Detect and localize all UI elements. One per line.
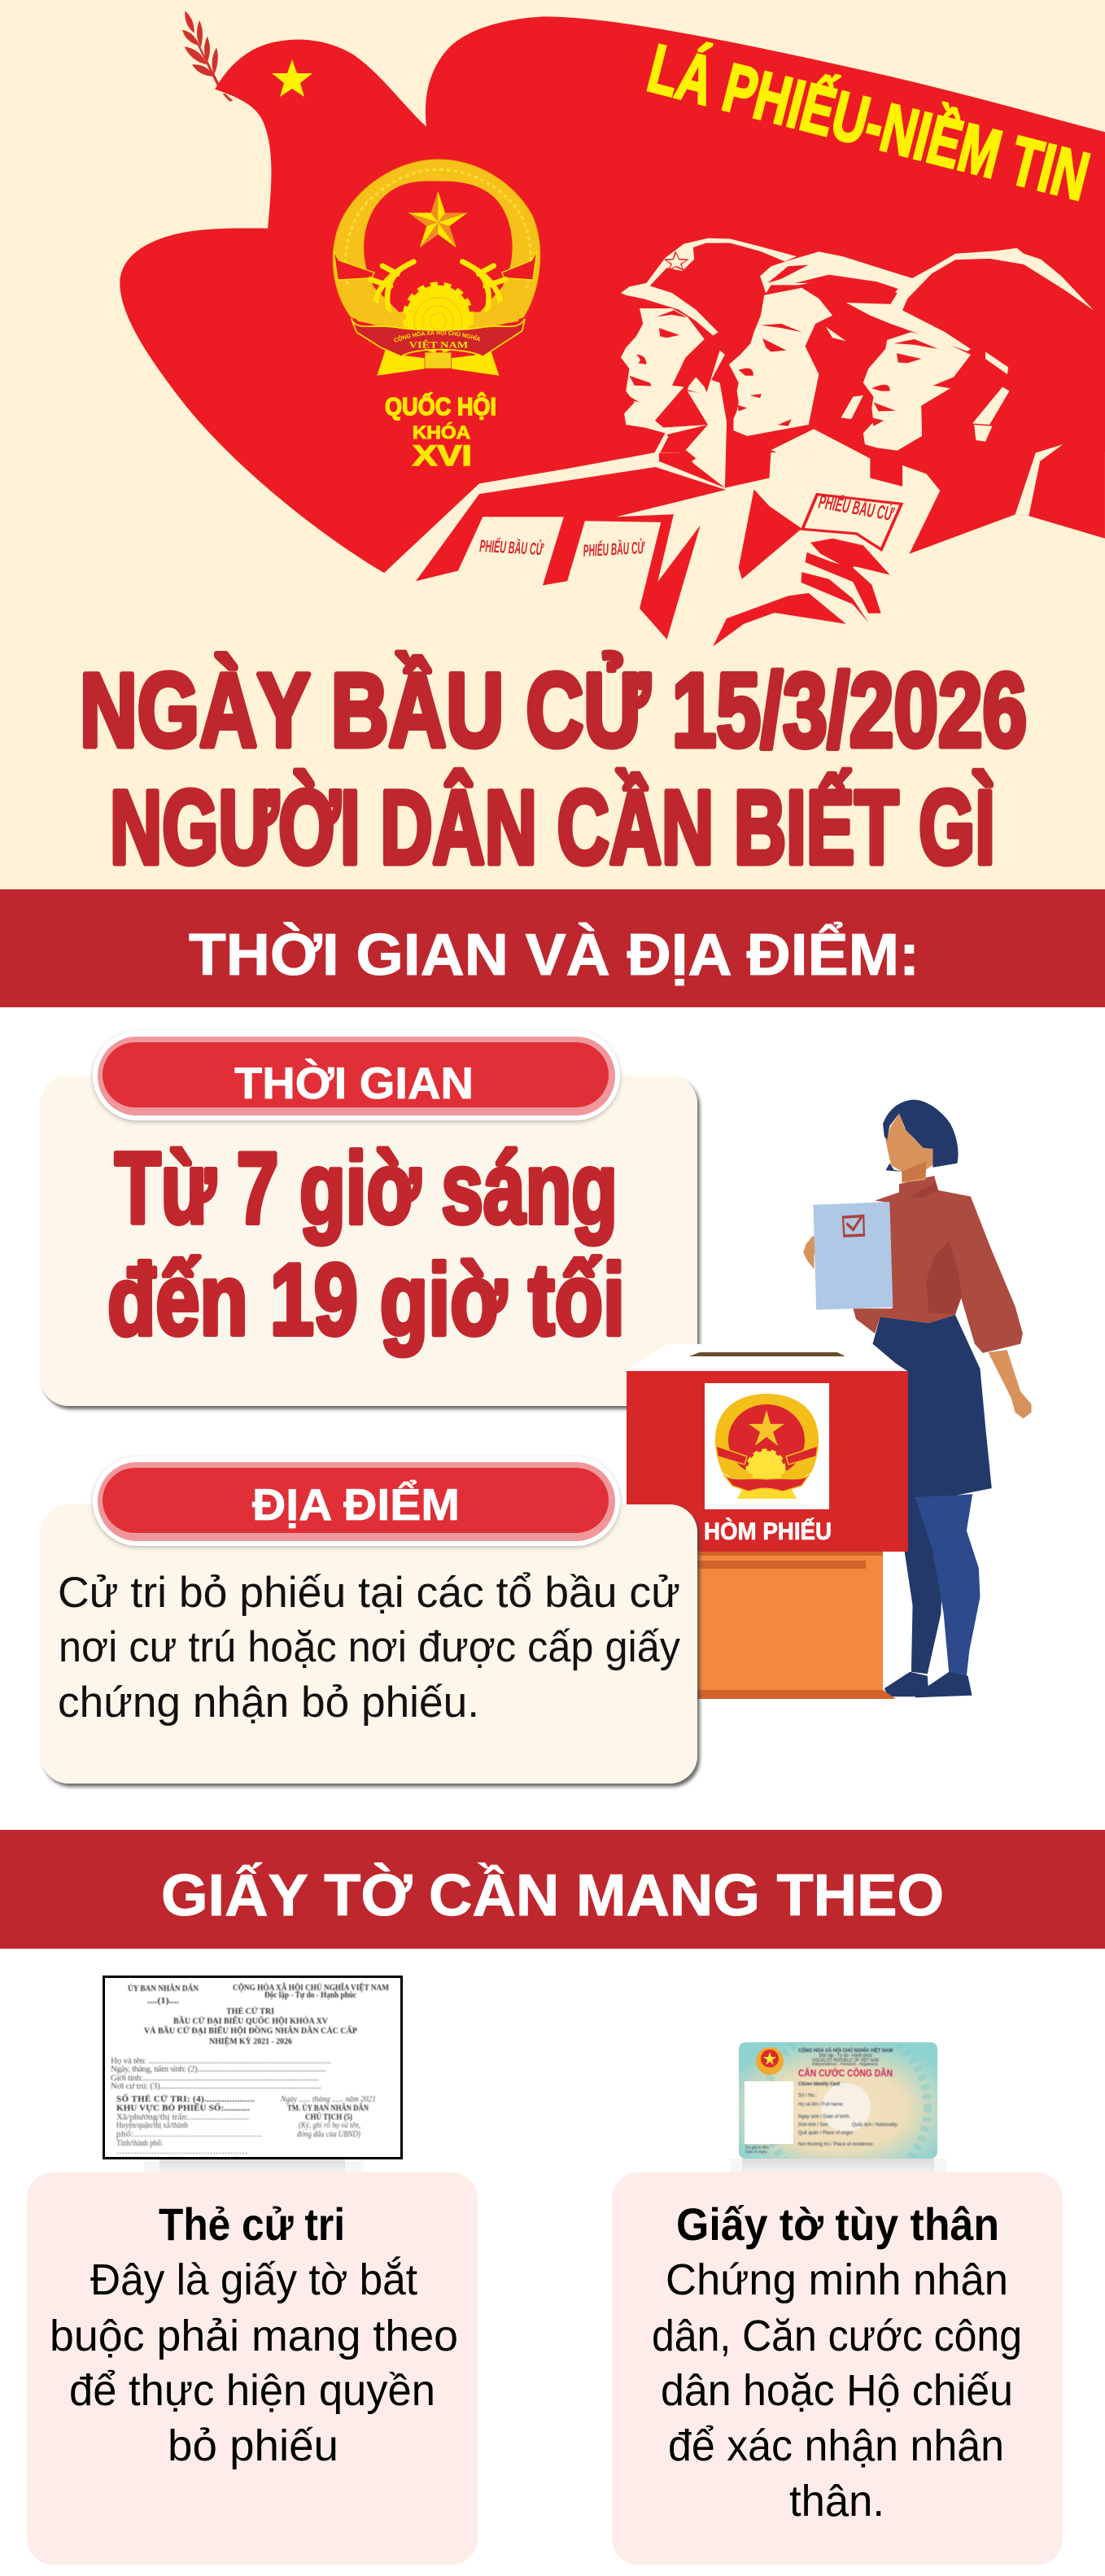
voter card fields: (Ký, ghi rõ họ và tên,: [299, 2120, 360, 2130]
time value text: Từ 7 giờ sáng: [115, 1133, 618, 1245]
voter card fields: Xã/phường/thị trấn:..........................: [116, 2112, 249, 2122]
voter card body text: bỏ phiếu: [168, 2421, 338, 2470]
first voter: face and neck: [570, 308, 727, 488]
ballot box label: HÒM PHIẾU: [704, 1517, 832, 1545]
identity document body text: [652, 2255, 1022, 2526]
voter card fields: đóng dấu của UBND): [297, 2129, 360, 2139]
voter card body text: để thực hiện quyền: [69, 2366, 435, 2415]
voter card header text: NHIỆM KỲ 2021 - 2026: [209, 2036, 292, 2046]
ballot label 2: PHIẾU BẦU CỬ: [583, 538, 646, 561]
identity document body text: để xác nhận nhân: [668, 2421, 1004, 2470]
second voter: face: [729, 288, 832, 436]
hero poster panel: [0, 0, 1105, 889]
voter card fields: Giới tính:.........................................................................................: [111, 2073, 319, 2083]
ballot box front: [627, 1371, 908, 1552]
left shoulder: [416, 467, 726, 585]
neck and collar second voter: [771, 429, 870, 478]
emblem star: [408, 191, 468, 247]
voter card body text: Đây là giấy tờ bắt: [90, 2255, 417, 2304]
panel: place: [41, 1504, 697, 1784]
ID card text: Quê quán / Place of origin:: [798, 2131, 854, 2136]
panel: time: [41, 1076, 697, 1406]
voter card header text: VÀ BẦU CỬ ĐẠI BIỂU HỘI ĐỒNG NHÂN DÂN CÁC CẤP: [144, 2025, 357, 2036]
second voter: facial features: [737, 324, 812, 436]
icon: star on the dove: [272, 59, 312, 97]
ID card text: Independence - Freedom - Happiness: [812, 2062, 878, 2067]
ballot box lid: [627, 1344, 907, 1371]
panel: voter card description: [27, 2172, 478, 2565]
ID card text: SOCIALIST REPUBLIC OF VIET NAM: [812, 2059, 879, 2063]
text: Quốc hội khóa XVI: QUỐC HỘI: [385, 391, 496, 421]
pill heading: time: THỜI GIAN: [234, 1058, 474, 1108]
section header: documents: [0, 1830, 1105, 1949]
voter card fields: KHU VỰC BỎ PHIẾU SỐ:...........: [116, 2102, 250, 2113]
voter card body text: [50, 2255, 458, 2470]
first voter: facial features: [628, 310, 708, 464]
main title: [80, 653, 1027, 886]
ID card text: Độc lập - Tự do - Hạnh phúc: [819, 2054, 872, 2059]
voter card header text: ....(1)....: [147, 1996, 179, 2006]
time value text: [107, 1133, 625, 1356]
ID card text: [745, 2047, 898, 2154]
ballot paper: [813, 1202, 893, 1310]
identity document title: Giấy tờ tùy thân: [676, 2198, 999, 2250]
voter card fields: TM. ỦY BAN NHÂN DÂN: [287, 2103, 369, 2113]
voter card header text: Độc lập - Tự do - Hạnh phúc: [264, 1990, 356, 2000]
held ballot card: [802, 495, 902, 549]
place description text: chứng nhận bỏ phiếu.: [58, 1679, 479, 1727]
ID card text: CĂN CƯỚC CÔNG DÂN: [798, 2068, 893, 2079]
voter card header text: [128, 1982, 390, 2046]
pill heading: time: [93, 1031, 620, 1120]
pill heading: place: [93, 1456, 620, 1546]
identity document body text: thân.: [789, 2477, 884, 2526]
voter card fields: Ngày, tháng, năm sinh: (2)....................................................................: [111, 2064, 326, 2074]
ID card text: Giới tính / Sex:: [798, 2123, 829, 2128]
ID card text: Số / No.:: [798, 2094, 817, 2098]
ID card emblem: [756, 2047, 784, 2075]
ID card text: Có giá trị đến:: [745, 2146, 770, 2150]
strap and collar details: [826, 326, 1063, 516]
voter card header text: THẺ CỬ TRI: [226, 2006, 274, 2016]
ID card text: CỘNG HÒA XÃ HỘI CHỦ NGHĨA VIỆT NAM: [798, 2047, 893, 2054]
panel: identity document description: [612, 2172, 1063, 2565]
pill heading: place: ĐỊA ĐIỂM: [252, 1479, 460, 1530]
voter card fields: CHỦ TỊCH (5): [305, 2112, 352, 2122]
voter card image: [104, 1977, 402, 2158]
white emblem plate: [705, 1383, 829, 1509]
voter card header text: ỦY BAN NHÂN DÂN: [128, 1984, 199, 1993]
ID card text: Nơi thường trú / Place of residence:: [798, 2142, 874, 2147]
identity document body text: dân hoặc Hộ chiếu: [661, 2366, 1013, 2415]
first voter: helmet outline: [621, 238, 797, 335]
voter card fields: Ngày ...... tháng ...... năm 2021: [280, 2094, 376, 2104]
illustration: woman voting at ballot box: [627, 1100, 1032, 1699]
ID card text: Quốc tịch / Nationality:: [852, 2123, 898, 2128]
citizen ID card image: [739, 2042, 937, 2159]
emblem country name: VIỆT NAM: [409, 339, 468, 351]
voter card fields: Nơi cư trú: (3)...............................................................................: [111, 2081, 321, 2091]
stand under ID card: [730, 2159, 946, 2175]
voter card fields: Họ và tên: ........................................................................................: [111, 2056, 331, 2066]
voter card body text: buộc phải mang theo: [50, 2312, 458, 2360]
ID card text: Date of expiry: [745, 2150, 768, 2154]
red collar and ballot hand: [640, 489, 890, 646]
emblem base: [377, 347, 499, 376]
ballot label 3: PHIẾU BẦU CỬ: [817, 490, 896, 526]
stand under voter card: [144, 2159, 364, 2175]
ID card text: Citizen Identity Card: [798, 2082, 840, 2087]
national emblem: [332, 159, 540, 376]
text: Quốc hội khóa XVI: [385, 391, 496, 472]
dove silhouette: [120, 16, 1105, 573]
place description text: Cử tri bỏ phiếu tại các tổ bầu cử: [58, 1569, 680, 1617]
text: Quốc hội khóa XVI: XVI: [413, 440, 472, 472]
second voter: hair highlight: [760, 251, 915, 294]
time value text: đến 19 giờ tối: [107, 1244, 625, 1356]
ID card text: Họ và tên / Full name:: [798, 2102, 844, 2107]
identity document body text: Chứng minh nhân: [666, 2255, 1008, 2304]
emblem scroll: [352, 319, 525, 356]
ID card text: Ngày sinh / Date of birth:: [798, 2115, 850, 2120]
figures: three voters: [570, 238, 1105, 646]
section header: time and place: THỜI GIAN VÀ ĐỊA ĐIỂM:: [189, 922, 919, 988]
emblem gear: [406, 286, 470, 349]
voter card fields: SỐ THẺ CỬ TRI: (4)....................: [116, 2094, 255, 2104]
place description text: [58, 1569, 680, 1727]
voter card fields: [111, 2056, 376, 2156]
ballot label 1: PHIẾU BẦU CỬ: [479, 536, 544, 559]
emblem scroll text: CỘNG HÒA XÃ HỘI CHỦ NGHĨA: [394, 330, 480, 342]
identity document body text: dân, Căn cước công: [652, 2312, 1022, 2360]
voter card title: Thẻ cử tri: [159, 2198, 345, 2250]
text: Quốc hội khóa XVI: KHÓA: [413, 422, 470, 443]
voter card fields: phố:.................................................: [116, 2129, 262, 2139]
voter card header text: BẦU CỬ ĐẠI BIỂU QUỐC HỘI KHÓA XV: [173, 2015, 328, 2026]
icon: olive branch: [182, 11, 234, 102]
voter card fields: Tỉnh/thành phố:: [116, 2138, 163, 2148]
woman figure: [803, 1100, 1032, 1697]
third voter: facial features: [871, 339, 938, 426]
third voter: face: [863, 332, 971, 451]
emblem on ballot box: [715, 1394, 819, 1499]
voter card header text: CỘNG HÒA XÃ HỘI CHỦ NGHĨA VIỆT NAM: [233, 1982, 390, 1993]
voter card fields: Huyện/quận/thị xã/thành: [116, 2120, 188, 2130]
orange stand: [692, 1552, 896, 1699]
section header: time and place: [0, 889, 1105, 1007]
section header: documents: GIẤY TỜ CẦN MANG THEO: [161, 1862, 944, 1928]
ID card photo placeholder: [745, 2081, 793, 2144]
voter card fields: .............................................: [116, 2146, 247, 2156]
place description text: nơi cư trú hoặc nơi được cấp giấy: [59, 1623, 680, 1671]
emblem red ribbons and rice: [334, 251, 537, 328]
third voter: helmet outline: [846, 248, 1094, 351]
